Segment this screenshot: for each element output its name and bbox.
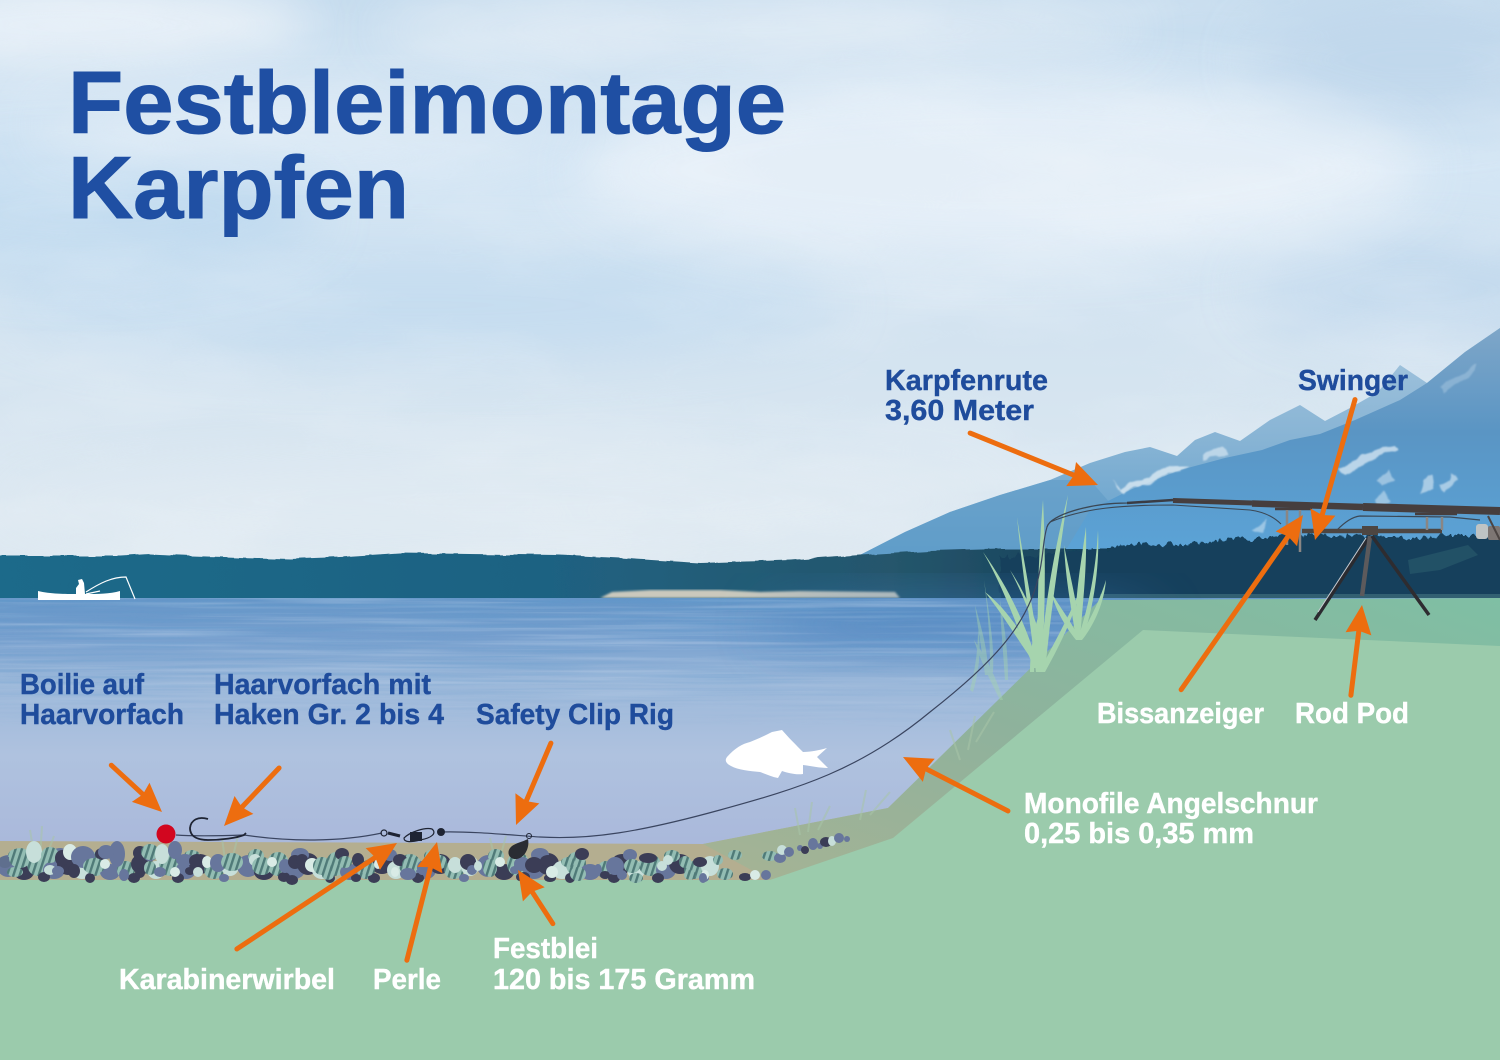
arrow: Karpfenrute bbox=[965, 421, 1103, 497]
lead weight bbox=[508, 834, 532, 859]
label: Monofile Angelschnur: 0,25 bis 0,35 mm bbox=[1024, 818, 1254, 850]
label: Haarvorfach mit Haken: Haken Gr. 2 bis 4 bbox=[214, 699, 444, 731]
reeds bbox=[970, 495, 1106, 700]
arrow: Festblei bbox=[507, 863, 564, 931]
arrow: Swinger bbox=[1302, 396, 1368, 544]
rod pod bbox=[1287, 510, 1442, 620]
sky background bbox=[0, 0, 1500, 570]
label: Safety Clip Rig: Safety Clip Rig bbox=[476, 699, 674, 731]
title: Karpfen bbox=[68, 138, 409, 237]
label: Karpfenrute bbox=[885, 365, 1048, 427]
label: Bissanzeiger: Bissanzeiger bbox=[1097, 698, 1264, 730]
title: Festbleimontage bbox=[68, 53, 786, 152]
mountains bbox=[858, 328, 1500, 560]
ground: lake bed bbox=[0, 630, 1500, 1060]
label: Haarvorfach mit Haken: Haarvorfach mit bbox=[214, 669, 431, 701]
arrow: Monofile Angelschnur bbox=[897, 745, 1014, 822]
arrow: Haarvorfach mit Haken bbox=[215, 759, 288, 835]
far shoreline bbox=[0, 549, 1120, 604]
label: Rod Pod: Rod Pod bbox=[1295, 698, 1409, 730]
label: Perle: Perle bbox=[373, 964, 441, 996]
arrow: Boilie bbox=[102, 756, 171, 822]
title bbox=[68, 53, 786, 237]
boilie bbox=[156, 824, 176, 844]
arrow: Rod Pod bbox=[1338, 603, 1375, 697]
fish silhouette bbox=[726, 730, 828, 778]
label: Karpfenrute: 3,60 Meter bbox=[885, 395, 1034, 427]
water bbox=[0, 598, 1500, 860]
label: Festblei bbox=[493, 933, 755, 996]
label: Monofile Angelschnur bbox=[1024, 788, 1318, 850]
label: Festblei: 120 bis 175 Gramm bbox=[493, 964, 755, 996]
label: Boilie auf Haarvorfach: Boilie auf bbox=[20, 669, 144, 701]
fishing line bbox=[176, 527, 1047, 840]
label: Boilie auf Haarvorfach: Haarvorfach bbox=[20, 699, 184, 731]
label: Monofile Angelschnur: Monofile Angelschnur bbox=[1024, 788, 1318, 820]
reel bbox=[1476, 516, 1500, 540]
arrow: Karabinerwirbel bbox=[230, 832, 404, 960]
hook bbox=[190, 818, 246, 840]
label: Festblei: Festblei bbox=[493, 933, 598, 965]
label: Haarvorfach mit Haken bbox=[214, 669, 444, 731]
label: Karabinerwirbel: Karabinerwirbel bbox=[119, 964, 335, 996]
label: Swinger: Swinger bbox=[1298, 365, 1408, 397]
boat with angler silhouette bbox=[38, 577, 135, 600]
ground: sand band bbox=[0, 700, 1000, 881]
arrow: Perle bbox=[394, 839, 450, 963]
sea grass tufts on the bed bbox=[30, 712, 994, 860]
label: Boilie auf Haarvorfach bbox=[20, 669, 184, 731]
pebbles bbox=[0, 833, 850, 885]
carp rod bbox=[1047, 500, 1500, 530]
label: Karpfenrute: Karpfenrute bbox=[885, 365, 1048, 397]
swivel and bead bbox=[381, 828, 445, 842]
arrow: Safety Clip Rig bbox=[504, 738, 563, 830]
forest bbox=[1000, 534, 1500, 602]
ground: slope band bbox=[703, 598, 1500, 880]
arrow: Bissanzeiger bbox=[1170, 508, 1314, 697]
